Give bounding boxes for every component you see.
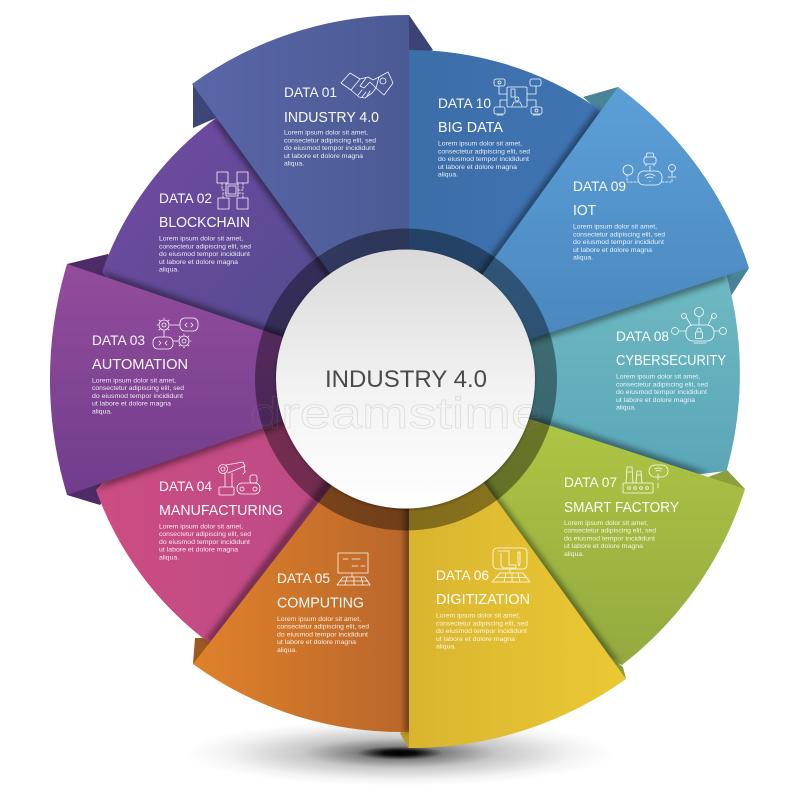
heading: COMPUTING <box>277 594 364 612</box>
body text: aliqua. <box>92 408 112 415</box>
segment base: Automation <box>50 264 407 495</box>
data label: DATA 02 <box>159 190 212 206</box>
body text: Lorem ipsum dolor sit amet, <box>159 236 243 243</box>
body text: consectetur adipiscing elit, sed <box>159 243 251 250</box>
body text: aliqua. <box>284 161 304 168</box>
icon: blockchain blocks <box>217 172 248 209</box>
body text: aliqua. <box>573 255 593 262</box>
icon: internet of things <box>623 153 676 185</box>
body text: aliqua. <box>277 647 297 654</box>
panel: data 10 big data <box>438 79 542 178</box>
body text <box>284 130 376 168</box>
body text: Lorem ipsum dolor sit amet, <box>436 612 520 620</box>
icon: smart factory <box>623 465 668 493</box>
body text: consectetur adipiscing elit, sed <box>616 381 708 388</box>
data label: DATA 08 <box>616 328 669 344</box>
dark ring <box>255 228 557 530</box>
body text: Lorem ipsum dolor sit amet, <box>438 140 522 148</box>
watermark: dreamstime <box>250 389 542 438</box>
panel: data 09 iot <box>573 153 676 262</box>
data label: DATA 03 <box>92 332 145 348</box>
heading: DIGITIZATION <box>436 591 530 608</box>
body text: consectetur adipiscing elit, sed <box>92 385 184 392</box>
panel: data 06 digitization <box>436 548 530 650</box>
panel: data 08 cybersecurity <box>616 308 726 412</box>
segment base: Blockchain <box>102 118 407 379</box>
heading: INDUSTRY 4.0 <box>284 109 379 126</box>
segment base: IoT <box>407 87 749 379</box>
body text: aliqua. <box>616 405 636 412</box>
body text: ut labore et dolore magna <box>616 397 695 404</box>
panel: data 03 automation <box>92 318 198 415</box>
body text <box>92 377 184 415</box>
body text: Lorem ipsum dolor sit amet, <box>277 616 361 623</box>
icon: network lock <box>672 308 726 343</box>
data label: DATA 04 <box>159 478 212 494</box>
body text: Lorem ipsum dolor sit amet, <box>573 224 657 231</box>
body text: Lorem ipsum dolor sit amet, <box>564 520 648 527</box>
heading: AUTOMATION <box>92 356 188 373</box>
body text: consectetur adipiscing elit, sed <box>438 148 530 155</box>
body text: Lorem ipsum dolor sit amet, <box>159 523 243 530</box>
centre disc <box>276 250 535 508</box>
segment base: Manufacturing <box>96 379 407 642</box>
heading: SMART FACTORY <box>564 499 679 516</box>
icon: big data server <box>494 79 542 115</box>
icon: automation gears <box>153 318 198 349</box>
body text: Lorem ipsum dolor sit amet, <box>284 130 368 137</box>
body text <box>564 520 656 558</box>
centre title: INDUSTRY 4.0 <box>325 366 487 393</box>
body text <box>436 612 528 650</box>
segment base: Computing <box>193 379 415 732</box>
body text <box>277 616 369 654</box>
body text <box>159 236 251 274</box>
body text: do eiusmod tempor incididunt <box>284 145 375 152</box>
data label: DATA 05 <box>277 570 330 586</box>
segment base: Big Data <box>400 50 640 379</box>
body text: aliqua. <box>436 644 456 650</box>
body text <box>573 224 665 262</box>
data label: DATA 07 <box>564 474 617 490</box>
body text: do eiusmod tempor incididunt <box>564 535 655 542</box>
body text: do eiusmod tempor incididunt <box>277 631 368 638</box>
body text: consectetur adipiscing elit, sed <box>284 137 376 144</box>
body text: do eiusmod tempor incididunt <box>438 156 529 163</box>
body text <box>616 374 708 412</box>
body text: aliqua. <box>438 172 458 178</box>
body text: consectetur adipiscing elit, sed <box>436 620 528 627</box>
body text: ut labore et dolore magna <box>159 259 238 266</box>
heading: BIG DATA <box>438 119 503 136</box>
heading: MANUFACTURING <box>159 502 283 519</box>
body text: consectetur adipiscing elit, sed <box>564 528 656 535</box>
icon: computer terminal <box>337 553 370 585</box>
heading: BLOCKCHAIN <box>159 214 250 231</box>
icon: scroll on monitor <box>492 548 530 582</box>
panel: data 01 industry 4.0 <box>284 72 393 168</box>
body text: aliqua. <box>159 554 179 561</box>
body text: ut labore et dolore magna <box>92 401 171 408</box>
panel: data 02 blockchain <box>159 172 251 274</box>
body text: do eiusmod tempor incididunt <box>92 393 183 400</box>
heading: IOT <box>573 202 596 219</box>
body text: ut labore et dolore magna <box>159 547 238 554</box>
body text: ut labore et dolore magna <box>436 636 515 643</box>
body text: do eiusmod tempor incididunt <box>159 539 250 546</box>
body text: consectetur adipiscing elit, sed <box>277 624 369 631</box>
body text: do eiusmod tempor incididunt <box>159 251 250 258</box>
segment base: Smart Factory <box>407 379 745 665</box>
data label: DATA 01 <box>284 84 337 100</box>
body text: do eiusmod tempor incididunt <box>616 389 707 396</box>
body text <box>438 140 530 178</box>
body text: ut labore et dolore magna <box>284 153 363 160</box>
panel: data 07 smart factory <box>564 465 679 558</box>
body text: do eiusmod tempor incididunt <box>573 239 664 246</box>
data label: DATA 10 <box>438 95 491 111</box>
heading: CYBERSECURITY <box>616 352 726 369</box>
icon: robot arm and conveyor <box>218 462 260 495</box>
body text: ut labore et dolore magna <box>564 543 643 550</box>
fold tabs behind segments <box>67 15 749 748</box>
icon: handshake <box>341 72 393 98</box>
cast shadows from digitization <box>401 479 621 735</box>
segment base: Digitization <box>409 379 626 748</box>
ground shadow <box>185 720 615 786</box>
body text: aliqua. <box>564 551 584 558</box>
segment base: Industry 4.0 <box>192 15 409 379</box>
body text: consectetur adipiscing elit, sed <box>573 231 665 238</box>
data label: DATA 09 <box>573 178 626 194</box>
panel: data 05 computing <box>277 553 370 654</box>
panel: data 04 manufacturing <box>159 462 283 561</box>
body text: aliqua. <box>159 267 179 274</box>
body text: do eiusmod tempor incididunt <box>436 628 527 635</box>
body text: ut labore et dolore magna <box>573 247 652 254</box>
body text <box>159 523 251 561</box>
body text: Lorem ipsum dolor sit amet, <box>616 374 700 381</box>
body text: ut labore et dolore magna <box>438 164 517 171</box>
body text: consectetur adipiscing elit, sed <box>159 531 251 538</box>
segment base: Cybersecurity <box>407 272 740 480</box>
body text: ut labore et dolore magna <box>277 639 356 646</box>
data label: DATA 06 <box>436 567 489 583</box>
cast shadows on lower segments <box>96 107 730 644</box>
body text: Lorem ipsum dolor sit amet, <box>92 377 176 384</box>
